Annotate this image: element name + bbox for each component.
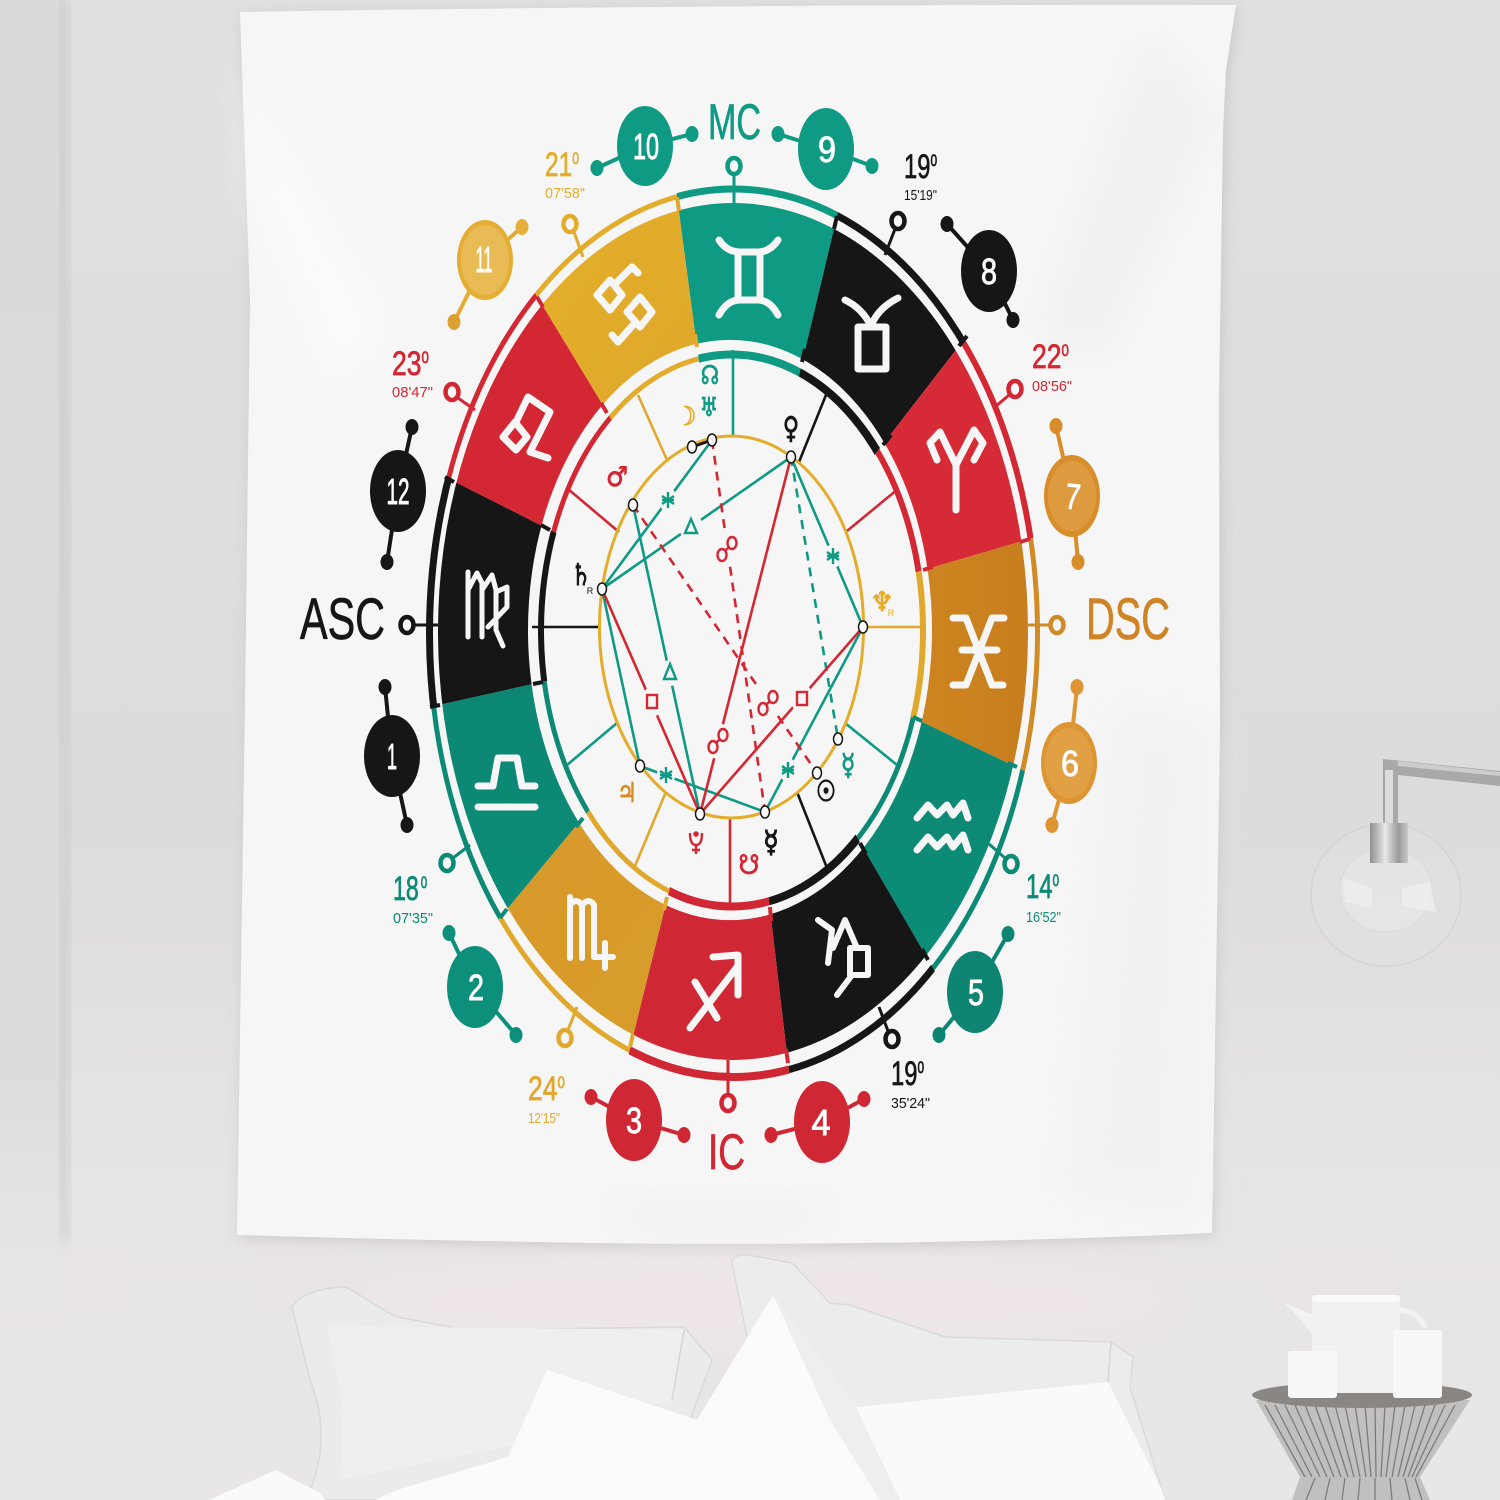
house badge 2: [442, 925, 522, 1043]
degree label 23: [392, 345, 433, 401]
icon: Taurus glyph: [845, 298, 898, 369]
label: ASC: ASC: [300, 587, 385, 652]
planet nodes: [598, 434, 868, 820]
house badge 5: [932, 926, 1014, 1043]
glyph: Moon: ☽: [676, 401, 696, 431]
house badge 11: 11: [476, 239, 492, 280]
house badge 7: 7: [1063, 475, 1083, 518]
degree label 19 top: 0: [930, 152, 937, 171]
marker: ASC: [400, 617, 438, 633]
degree label 18: 0: [421, 874, 427, 893]
marker: 19 degrees bottom: [879, 1007, 898, 1047]
sector: Scorpio (gold): [498, 810, 670, 1053]
sector: Aquarius (teal): [856, 716, 1025, 970]
marker: 18 degrees: [440, 845, 470, 871]
house badge 4: 4: [812, 1102, 830, 1143]
glyph: Jupiter: ♃: [617, 777, 637, 809]
degree label 14: 16'52": [1026, 909, 1061, 926]
house badge 9: 9: [818, 129, 836, 170]
house badge 10: 10: [633, 126, 659, 167]
glyph: Mercury (teal): ☿: [841, 748, 855, 783]
glyph: Venus: ♀: [783, 412, 799, 446]
zodiac wheel: [430, 189, 1038, 1077]
marker: 21 degrees: [564, 216, 583, 257]
degree label 19 top: [904, 148, 937, 204]
side table with tea set: [1252, 1295, 1472, 1500]
degree label 23: 0: [422, 349, 429, 367]
house badge 7: [1044, 418, 1100, 570]
icon: Aries glyph: [930, 430, 983, 510]
degree label 21: [545, 146, 585, 202]
house badge 8: 8: [981, 251, 997, 292]
symbol: opposition: [754, 685, 782, 721]
degree label 21: 07'58": [545, 185, 585, 202]
glyph: north node: ☊: [701, 360, 719, 391]
house badge 9: [772, 108, 878, 190]
sector: Pisces (orange): [910, 538, 1040, 771]
house badge 8: [940, 216, 1020, 328]
symbol: trine: [679, 514, 703, 540]
label: MC: MC: [708, 94, 761, 150]
degree label 24: 0: [558, 1074, 565, 1092]
sector: Gemini (teal): [676, 186, 838, 377]
red aspect lines: [602, 457, 863, 814]
symbol: sextile: [657, 763, 675, 787]
sector: Libra (teal): [431, 681, 590, 920]
degree label 22: 22: [1032, 338, 1062, 376]
symbol: square: [791, 684, 813, 714]
marker: 22 degrees: [995, 381, 1022, 407]
glyph: Saturn retrograde: ♄: [571, 559, 591, 593]
degree label 23: 08'47": [392, 384, 433, 401]
marker: 19 degrees top: [885, 213, 904, 255]
house badge 12: 12: [386, 471, 410, 512]
degree label 19 bottom: 35'24": [891, 1095, 930, 1112]
sector: Cancer (gold): [535, 194, 699, 420]
symbol: sextile: [824, 544, 842, 568]
sector: Virgo (black): [426, 479, 556, 705]
planet glyphs: [571, 360, 895, 880]
house badge 5: 5: [968, 972, 984, 1013]
teal aspect lines: [602, 440, 863, 814]
icon: Pluto glyph: [690, 831, 702, 854]
degree label 24: [528, 1070, 565, 1127]
degree label 21: 0: [572, 150, 579, 169]
degree label 23: 23: [392, 345, 422, 383]
icon: Virgo glyph: [468, 572, 507, 646]
degree label 14: [1026, 868, 1061, 926]
label: IC: IC: [708, 1124, 745, 1180]
house badge 10: [590, 106, 698, 186]
marker: 24 degrees: [558, 1007, 577, 1046]
degree label 22: 0: [1062, 342, 1069, 360]
icon: Libra glyph: [478, 758, 535, 807]
sector: Leo (red): [446, 292, 612, 533]
icon: Cancer glyph: [597, 267, 652, 342]
house badge 6: 6: [1061, 743, 1079, 784]
degree label 24: 12'15": [528, 1110, 560, 1127]
house badge 3: [584, 1079, 690, 1161]
icon: Sagittarius glyph: [690, 955, 738, 1028]
glyph: Neptune retrograde: R: [888, 608, 895, 618]
glyph: Saturn retrograde: R: [587, 586, 594, 596]
marker: DSC: [1028, 617, 1064, 633]
icon: Pisces glyph: [953, 618, 1004, 685]
degree label 18: 18: [393, 871, 419, 908]
icon: Gemini glyph: [719, 240, 778, 315]
degree label 21: 21: [545, 146, 572, 184]
icon: Capricorn glyph: [818, 920, 868, 995]
label: DSC: DSC: [1086, 587, 1170, 652]
symbol: square: [641, 687, 663, 717]
house badge 1: 1: [387, 736, 397, 777]
degree label 18: 07'35": [393, 910, 433, 927]
teal dashed line: [791, 457, 838, 739]
degree label 22: [1032, 338, 1072, 395]
marker: IC: [722, 1060, 734, 1111]
house badge 6: [1041, 679, 1097, 833]
glyph: Sun: ☉: [816, 775, 836, 809]
degree label 22: 08'56": [1032, 378, 1072, 395]
red dashed lines: [633, 440, 817, 812]
icon: Scorpio glyph: [570, 897, 613, 968]
tapestry cloth: [237, 5, 1238, 1247]
degree label 14: 0: [1052, 872, 1059, 891]
glyph: Uranus: ♅: [700, 392, 718, 423]
inner aspect ring: [600, 436, 864, 818]
degree label 14: 14: [1026, 868, 1052, 906]
icon: Leo glyph: [503, 397, 550, 458]
symbol: opposition: [713, 531, 741, 567]
sector: Sagittarius (red): [628, 887, 790, 1081]
glyph: Neptune retrograde: ♆: [870, 586, 894, 618]
glyph: Mars: ♂: [606, 462, 628, 493]
sector: Capricorn (black): [768, 834, 935, 1074]
symbol: sextile: [659, 488, 677, 512]
degree label 19 bottom: [891, 1055, 930, 1112]
bed pillows and linen: [209, 1255, 1165, 1500]
aspect lines chart: [602, 440, 863, 814]
house badge 12: [370, 419, 426, 570]
house badge 4: [764, 1081, 870, 1163]
cusp marker rings: [400, 158, 1064, 1111]
house badge 2: 2: [468, 967, 484, 1008]
glyph: south node: ☋: [739, 848, 759, 880]
sector: Taurus (black): [798, 212, 964, 455]
house spokes: [532, 350, 923, 906]
lamp: [1311, 759, 1500, 966]
glyph: Mercury (black): ☿: [763, 826, 779, 860]
symbol: sextile: [779, 758, 797, 782]
icon: Aquarius glyph: [917, 803, 968, 850]
degree label 19 bottom: 0: [917, 1059, 924, 1078]
degree label 19 top: 19: [904, 148, 930, 186]
symbol: trine: [659, 660, 681, 686]
degree label 18: [393, 871, 433, 927]
house badge 3: 3: [626, 1100, 642, 1141]
aspect symbols: [641, 488, 842, 787]
house badge 11: [448, 219, 528, 330]
degree label 19 bottom: 19: [891, 1055, 917, 1093]
marker: MC: [728, 158, 740, 203]
marker: 14 degrees: [989, 844, 1018, 872]
degree label 19 top: 15'19": [904, 187, 937, 204]
marker: 23 degrees: [446, 384, 475, 410]
symbol: opposition: [704, 723, 732, 759]
degree label 24: 24: [528, 1070, 558, 1108]
sector: Aries (red): [876, 340, 1034, 572]
house badge 1: [364, 679, 420, 833]
